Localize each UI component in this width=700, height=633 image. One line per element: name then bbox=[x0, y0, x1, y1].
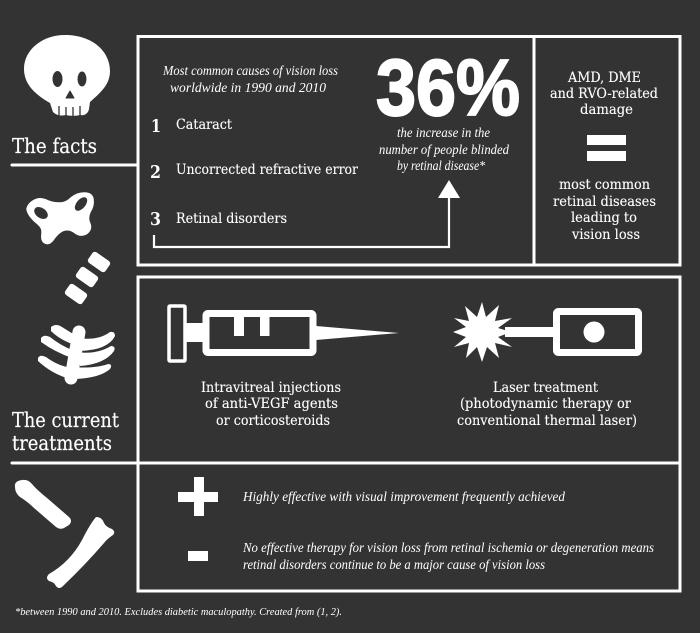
text: most common: most common bbox=[559, 177, 650, 193]
text: negative: No effective therapy for vision loss from retinal ischemia or degeneration means bbox=[242, 540, 654, 555]
intro text bbox=[162, 63, 338, 95]
icon: skull bbox=[24, 35, 110, 116]
text: laser bbox=[457, 380, 637, 429]
text: laser: conventional thermal laser) bbox=[457, 413, 637, 429]
icon: minus bbox=[188, 551, 208, 561]
text: most common: retinal diseases bbox=[553, 194, 656, 210]
text: injections bbox=[201, 380, 341, 429]
cause 1 bbox=[151, 116, 232, 137]
icon: pelvis bone bbox=[27, 193, 93, 244]
icon: bone 2 bbox=[47, 517, 114, 588]
intro text: worldwide in 1990 and 2010 bbox=[170, 80, 326, 95]
text: AMD, DME bbox=[550, 70, 658, 118]
heading: The current treatments: treatments bbox=[12, 431, 112, 455]
cause 1: Cataract bbox=[176, 117, 232, 133]
stat caption: the increase in the bbox=[397, 125, 490, 140]
text: negative: retinal disorders continue to be a major cause of vision loss bbox=[243, 557, 545, 572]
text: laser: Laser treatment bbox=[493, 380, 598, 396]
heading: The current treatments: The current bbox=[12, 408, 120, 432]
text: most common: vision loss bbox=[571, 227, 640, 243]
arrow bbox=[154, 180, 460, 247]
text: AMD, DME: and RVO-related bbox=[550, 86, 658, 102]
footnote: *between 1990 and 2010. Excludes diabetic maculopathy. Created from (1, 2). bbox=[15, 606, 342, 618]
text: most common bbox=[553, 177, 656, 243]
text: injections: of anti-VEGF agents bbox=[205, 396, 338, 412]
icon: syringe bbox=[169, 306, 399, 361]
panel: most common retinal diseases bbox=[550, 70, 658, 243]
panel: effectiveness bbox=[178, 477, 654, 572]
stat: 36%: 36% bbox=[376, 43, 520, 132]
heading: The current treatments bbox=[12, 408, 120, 455]
heading: The facts: The facts bbox=[12, 134, 97, 158]
panel: treatments bbox=[169, 302, 638, 429]
text: positive: Highly effective with visual improvement frequently achieved bbox=[242, 489, 565, 504]
icon: plus bbox=[178, 477, 218, 516]
stat caption bbox=[379, 125, 509, 173]
cause 3: Retinal disorders bbox=[176, 211, 287, 227]
icon: vertebrae bbox=[64, 251, 111, 305]
cause 2 bbox=[150, 162, 358, 183]
stat caption: by retinal disease* bbox=[397, 158, 485, 173]
icon: laser bbox=[453, 302, 638, 362]
text: most common: leading to bbox=[571, 210, 637, 226]
text: injections: or corticosteroids bbox=[216, 413, 330, 429]
icon: rib cage bbox=[38, 325, 115, 379]
text: AMD, DME: AMD, DME bbox=[567, 70, 641, 86]
icon: equals bbox=[587, 135, 626, 161]
text: negative bbox=[242, 540, 654, 572]
text: laser: (photodynamic therapy or bbox=[460, 396, 631, 412]
text: AMD, DME: damage bbox=[580, 102, 633, 118]
icon: bone 1 bbox=[15, 480, 71, 529]
text: injections: Intravitreal injections bbox=[201, 380, 341, 396]
cause 3: 3 bbox=[150, 209, 161, 230]
panel: causes of vision loss bbox=[150, 43, 520, 247]
cause 2: Uncorrected refractive error bbox=[176, 162, 358, 178]
cause 3 bbox=[150, 209, 287, 230]
cause 2: 2 bbox=[150, 162, 161, 183]
cause 1: 1 bbox=[151, 116, 161, 137]
intro text: Most common causes of vision loss bbox=[162, 63, 338, 78]
stat caption: number of people blinded bbox=[379, 142, 509, 157]
